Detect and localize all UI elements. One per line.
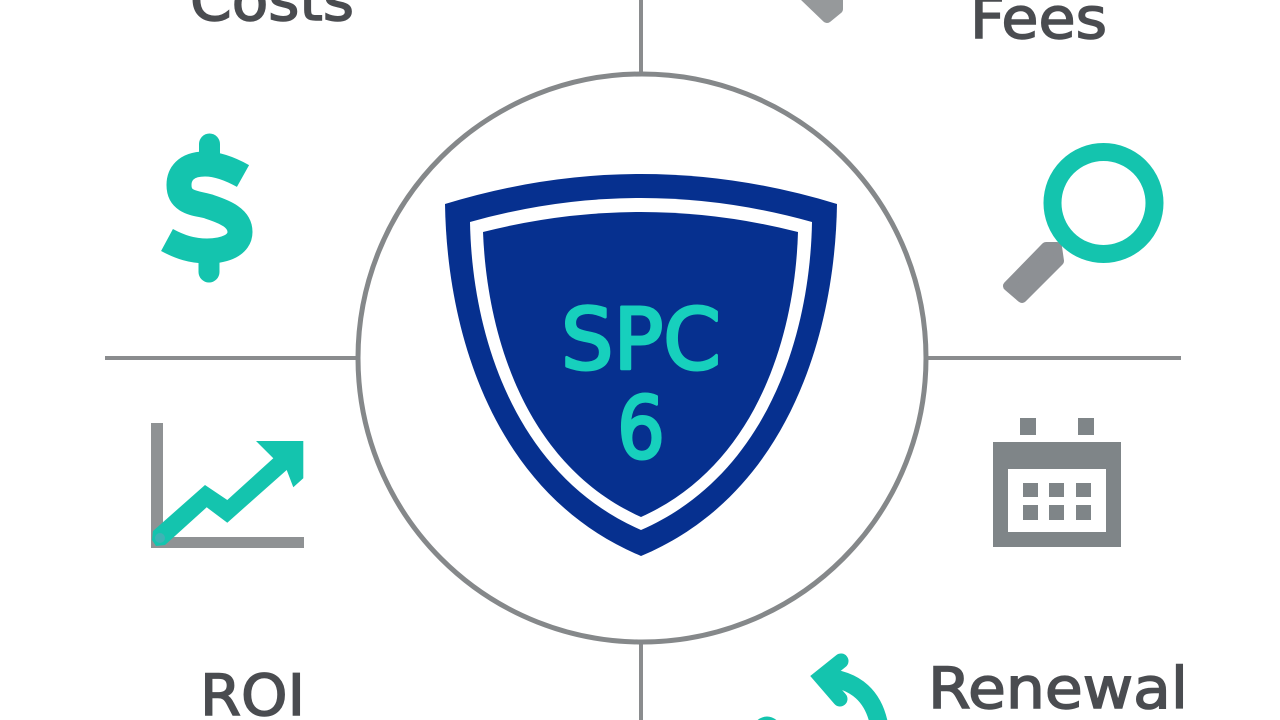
shield badge bbox=[445, 174, 837, 556]
icon: calendar bbox=[993, 418, 1121, 547]
icon: cropped tool handle at top bbox=[802, 0, 838, 18]
shield text: SPC: SPC bbox=[561, 291, 721, 390]
central circle bbox=[358, 74, 926, 642]
icon: dollar sign bbox=[167, 144, 243, 272]
shield text: 6: 6 bbox=[617, 379, 665, 479]
icon: magnifying glass bbox=[1008, 152, 1154, 298]
icon: renewal arrow bbox=[756, 661, 880, 720]
icon: growth chart bbox=[151, 423, 304, 548]
